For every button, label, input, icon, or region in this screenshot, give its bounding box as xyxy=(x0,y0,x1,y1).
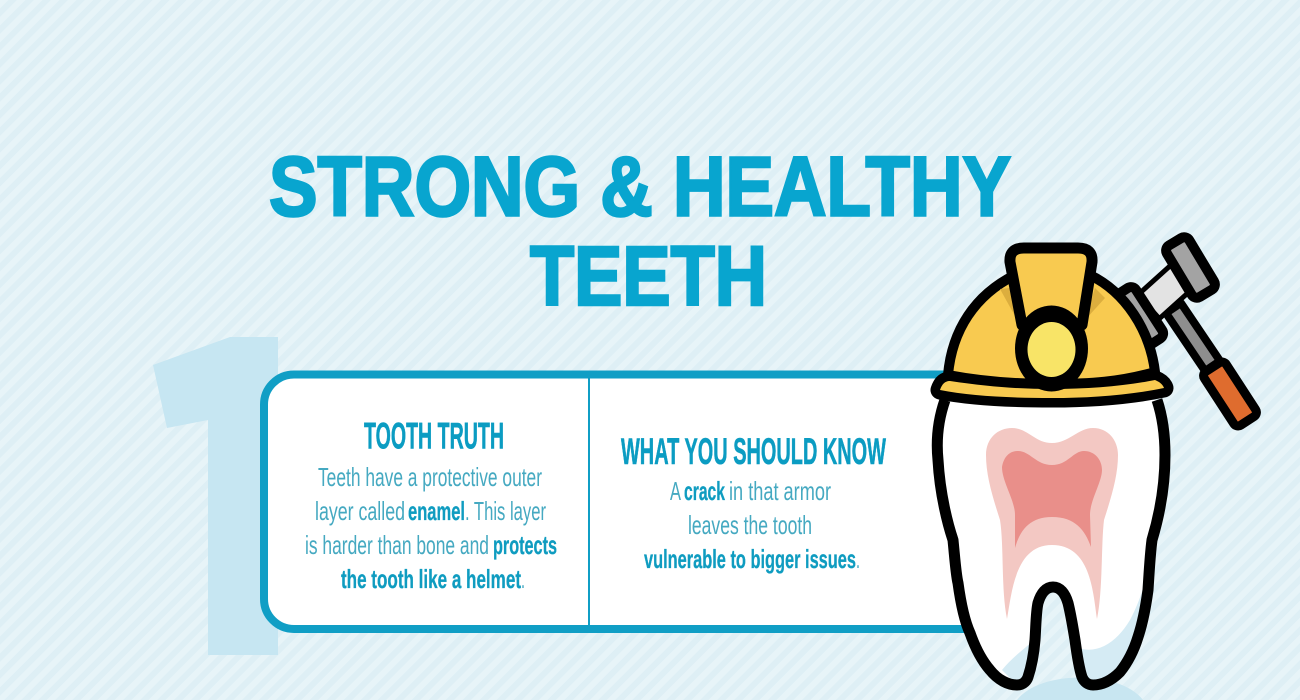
text block: what you should know: . xyxy=(856,544,860,574)
text block: tooth truth: Teeth have a protective outer xyxy=(318,462,542,492)
text block: what you should know: WHAT YOU SHOULD KNOW xyxy=(621,431,886,472)
text block: tooth truth: enamel xyxy=(408,496,465,526)
icon: hammer xyxy=(1113,235,1258,428)
icon: tooth body xyxy=(937,400,1165,685)
text block: tooth truth: . This layer xyxy=(465,496,546,526)
text block: tooth truth: layer called xyxy=(315,496,405,526)
text block: tooth truth: TOOTH TRUTH xyxy=(364,416,504,456)
panel: info card xyxy=(264,374,1009,629)
icon: helmet lamp xyxy=(1015,306,1088,392)
text block: tooth truth: the tooth like a helmet xyxy=(341,564,521,594)
text block: tooth truth: protects xyxy=(493,530,557,560)
tooth pulp inner xyxy=(1002,451,1102,548)
title xyxy=(269,140,1011,323)
text block: what you should know: vulnerable to bigger issues xyxy=(644,544,856,574)
tooth pulp outer xyxy=(986,428,1118,619)
text block: what you should know: in that armor xyxy=(729,476,831,506)
decorative circle under tooth xyxy=(1017,678,1143,700)
icon: helmet xyxy=(940,248,1164,398)
large number 1 xyxy=(153,337,278,655)
text block: tooth truth: . xyxy=(521,564,525,594)
text block: what you should know xyxy=(621,431,886,574)
text block: what you should know: crack xyxy=(684,476,725,506)
title: STRONG & HEALTHY xyxy=(269,140,1011,234)
icon: tooth with helmet and hammer xyxy=(937,235,1258,685)
text block: tooth truth: is harder than bone and xyxy=(305,530,489,560)
text block: tooth truth xyxy=(305,416,557,594)
title: TEETH xyxy=(530,229,767,323)
text block: what you should know: A xyxy=(670,476,681,506)
text block: what you should know: leaves the tooth xyxy=(688,510,812,540)
